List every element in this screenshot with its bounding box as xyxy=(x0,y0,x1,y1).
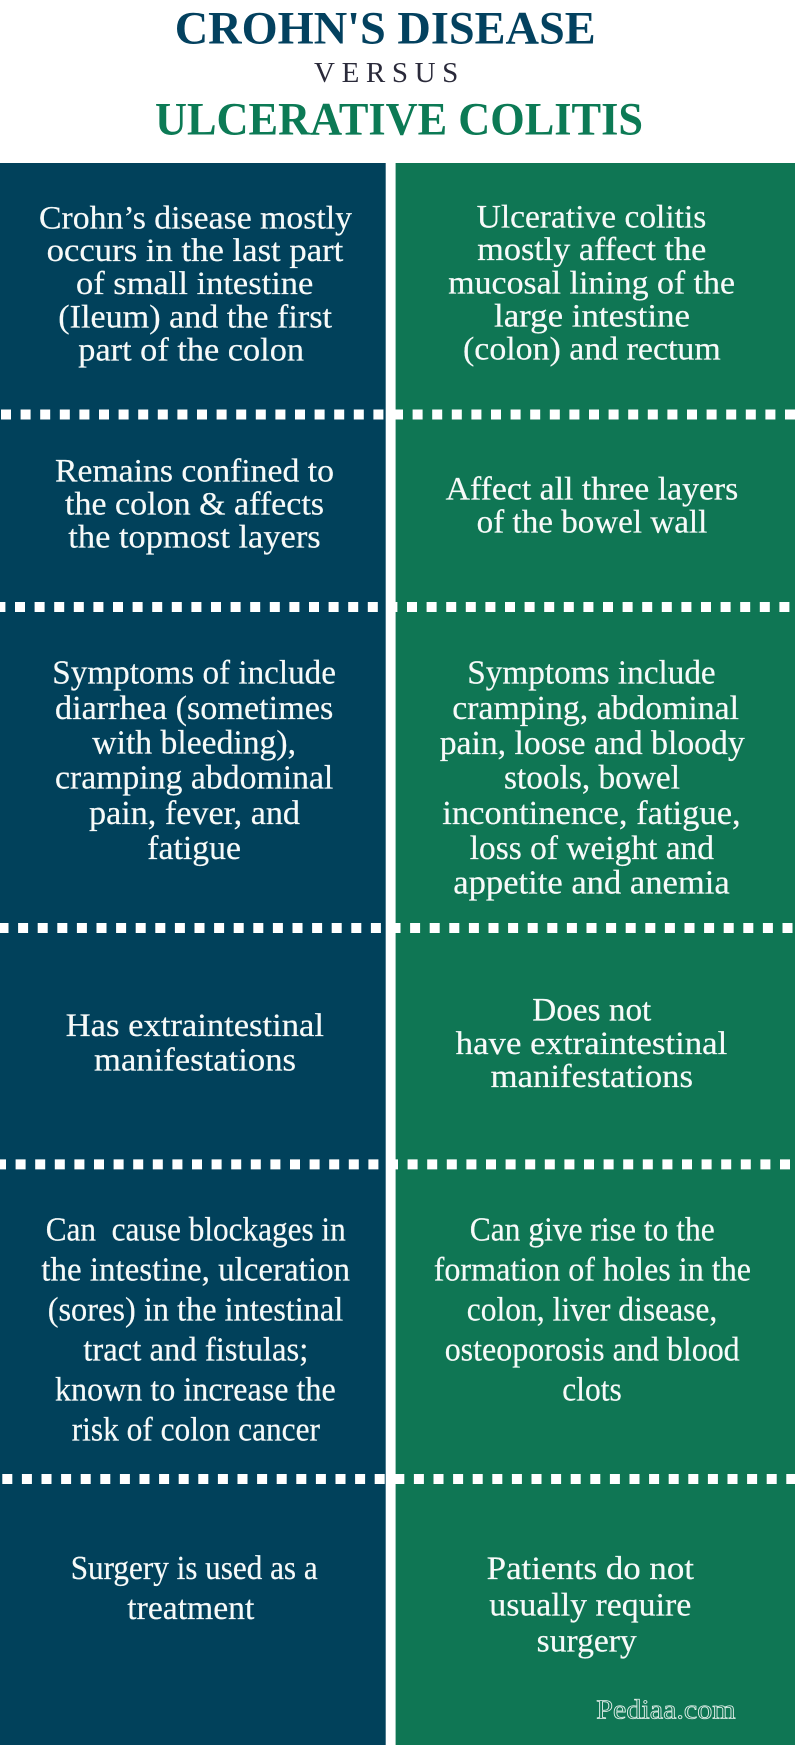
logo: Pediaa.com watermark: Pediaa.com xyxy=(596,1694,736,1724)
text: symptoms of Crohn's disease: fatigue xyxy=(147,830,241,867)
text: complications of ulcerative colitis: Can give rise to the xyxy=(470,1211,715,1248)
text: complications of Crohn's disease: known to increase the xyxy=(55,1372,336,1409)
text: extraintestinal manifestations in Crohn's disease: manifestations xyxy=(94,1042,296,1078)
text: layers affected by ulcerative colitis: Affect all three layers xyxy=(446,471,738,507)
text: extraintestinal manifestations in ulcerative colitis xyxy=(456,993,727,1095)
text: complications of Crohn's disease: the intestine, ulceration xyxy=(41,1251,350,1288)
text: symptoms of ulcerative colitis: loss of weight and xyxy=(470,830,714,867)
text: symptoms of Crohn's disease: Symptoms of include xyxy=(52,655,336,692)
text: location of ulcerative colitis xyxy=(448,199,735,367)
title block xyxy=(155,2,643,145)
text: complications of ulcerative colitis xyxy=(434,1211,751,1409)
text: complications of Crohn's disease: Can cause blockages in xyxy=(46,1211,346,1248)
text: layers affected by ulcerative colitis xyxy=(446,471,738,540)
text: extraintestinal manifestations in Crohn's disease xyxy=(66,1008,324,1078)
text: treatment of Crohn's disease: Surgery is used as a xyxy=(71,1550,318,1587)
text: symptoms of ulcerative colitis: stools, bowel xyxy=(504,760,680,797)
text: treatment of ulcerative colitis: Patients do not xyxy=(487,1551,694,1587)
text: symptoms of Crohn's disease xyxy=(52,655,336,867)
text: symptoms of ulcerative colitis: cramping, abdominal xyxy=(452,690,739,727)
text: symptoms of ulcerative colitis: Symptoms include xyxy=(467,655,716,692)
text: layers affected by ulcerative colitis: of the bowel wall xyxy=(477,504,707,540)
text: extraintestinal manifestations in ulcerative colitis: have extraintestinal xyxy=(456,1026,727,1062)
text: symptoms of ulcerative colitis xyxy=(440,655,745,902)
heading: Crohn's disease: CROHN'S DISEASE xyxy=(175,2,596,54)
text: extraintestinal manifestations in ulcerative colitis: manifestations xyxy=(491,1059,693,1095)
text: symptoms of ulcerative colitis: pain, loose and bloody xyxy=(440,725,745,762)
text: complications of Crohn's disease: tract and fistulas; xyxy=(83,1331,308,1368)
text: extraintestinal manifestations in Crohn's disease: Has extraintestinal xyxy=(66,1008,324,1044)
text: symptoms of Crohn's disease: cramping abdominal xyxy=(55,760,333,797)
text: complications of ulcerative colitis: colon, liver disease, xyxy=(467,1292,717,1328)
text: location of ulcerative colitis: Ulcerative colitis xyxy=(477,199,706,235)
text: location of Crohn's disease: part of the colon xyxy=(78,332,304,368)
text: extraintestinal manifestations in ulcerative colitis: Does not xyxy=(532,993,651,1029)
text: complications of ulcerative colitis: osteoporosis and blood xyxy=(445,1331,740,1368)
text: symptoms of Crohn's disease: diarrhea (sometimes xyxy=(55,690,333,727)
panel: Crohn's disease column xyxy=(0,163,386,1745)
text: symptoms of Crohn's disease: pain, fever, and xyxy=(89,795,300,832)
text: complications of ulcerative colitis: formation of holes in the xyxy=(434,1251,751,1288)
subheading: versus: VERSUS xyxy=(314,57,458,89)
text: location of Crohn's disease: of small intestine xyxy=(76,266,313,302)
text: complications of Crohn's disease: (sores) in the intestinal xyxy=(48,1292,343,1328)
text: treatment of ulcerative colitis: surgery xyxy=(537,1624,637,1660)
text: location of ulcerative colitis: mostly affect the xyxy=(477,232,706,268)
text: layers affected by Crohn's disease xyxy=(55,454,334,556)
text: symptoms of ulcerative colitis: incontinence, fatigue, xyxy=(442,795,741,832)
text: treatment of ulcerative colitis xyxy=(487,1551,694,1660)
text: location of Crohn's disease xyxy=(39,200,353,368)
text: location of Crohn's disease: occurs in the last part xyxy=(47,233,343,269)
text: location of Crohn's disease: Crohn’s disease mostly xyxy=(39,200,353,236)
text: complications of Crohn's disease xyxy=(41,1211,350,1448)
text: treatment of ulcerative colitis: usually require xyxy=(489,1588,691,1624)
text: location of ulcerative colitis: mucosal lining of the xyxy=(448,265,735,301)
text: treatment of Crohn's disease: treatment xyxy=(127,1590,255,1627)
text: location of Crohn's disease: (Ileum) and the first xyxy=(58,299,332,335)
text: layers affected by Crohn's disease: the topmost layers xyxy=(68,520,321,556)
text: location of ulcerative colitis: (colon) and rectum xyxy=(463,331,721,367)
text: layers affected by Crohn's disease: Remains confined to xyxy=(55,454,334,490)
text: symptoms of ulcerative colitis: appetite and anemia xyxy=(453,865,730,902)
text: complications of Crohn's disease: risk of colon cancer xyxy=(72,1412,321,1448)
text: layers affected by Crohn's disease: the colon & affects xyxy=(65,487,324,523)
panel: ulcerative colitis column xyxy=(396,163,795,1745)
text: treatment of Crohn's disease xyxy=(71,1550,318,1627)
heading: ulcerative colitis: ULCERATIVE COLITIS xyxy=(155,93,643,145)
text: location of ulcerative colitis: large intestine xyxy=(494,298,690,334)
text: symptoms of Crohn's disease: with bleeding), xyxy=(92,725,296,762)
text: complications of ulcerative colitis: clots xyxy=(562,1372,622,1409)
